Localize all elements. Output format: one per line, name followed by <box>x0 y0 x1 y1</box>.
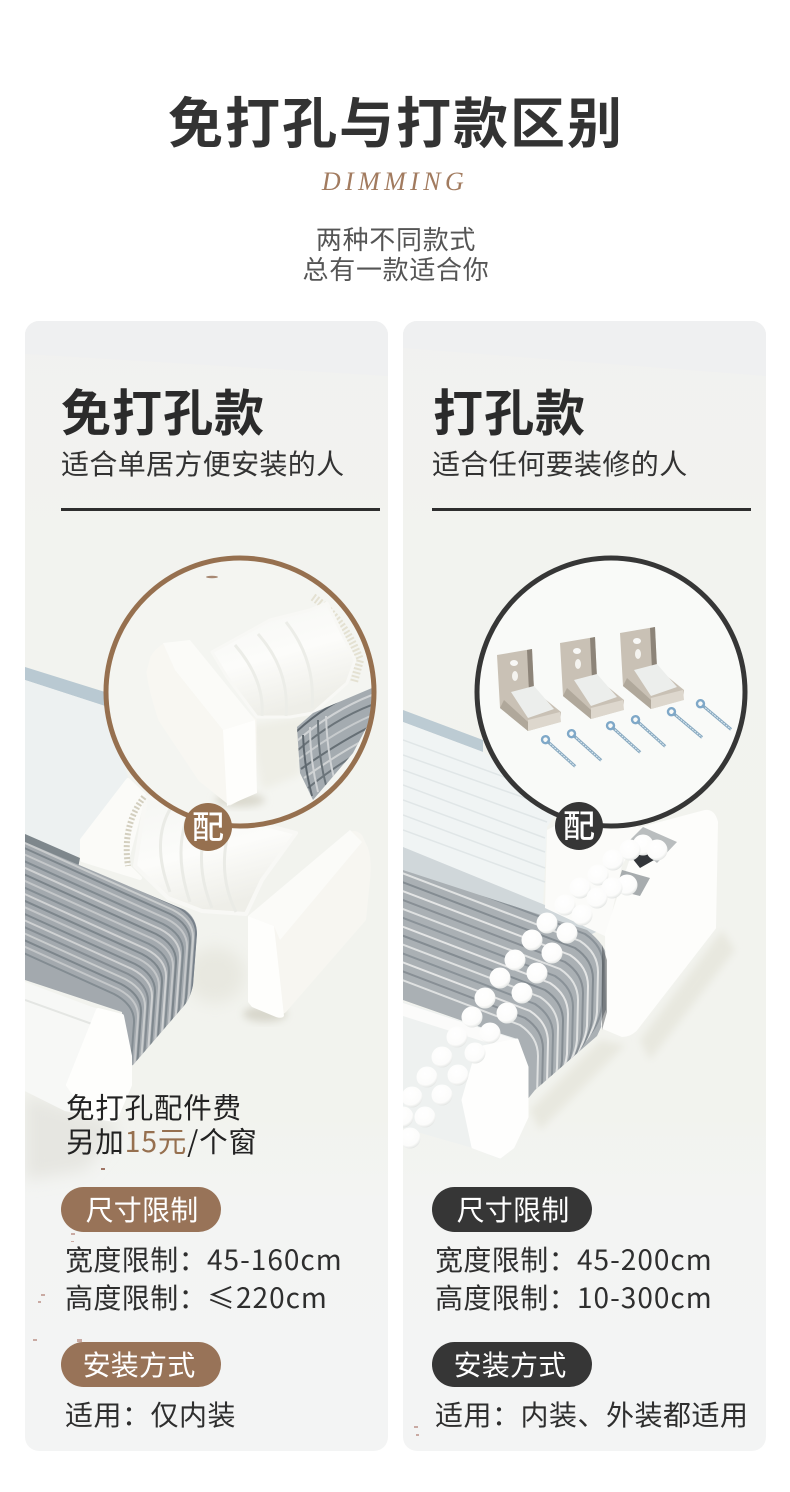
sub-heading: 适合单居方便安装的人 <box>61 443 345 483</box>
pill: 安装方式 <box>61 1342 221 1387</box>
intro text: 两种不同款式 <box>316 220 476 257</box>
pill: 安装方式: 安装方式 <box>83 1344 195 1384</box>
badge: 配 (drilled): 配 <box>563 801 595 847</box>
accessory fee note: 另加15元/个窗 <box>66 1120 258 1161</box>
magnifier circle: no-drill fitting <box>106 558 380 826</box>
product photo: no-drill blind <box>0 667 371 1180</box>
bead chain: strand 1 <box>392 834 654 1128</box>
accessory fee note <box>67 1094 255 1157</box>
accessory fee note: 免打孔配件费 <box>66 1086 242 1127</box>
panel: no-drill version <box>0 321 388 1451</box>
title: 免打孔与打款区别 <box>168 79 624 159</box>
intro text: 总有一款适合你 <box>303 250 489 287</box>
panel: drilled version <box>403 321 766 1451</box>
pill: 尺寸限制 <box>432 1187 592 1232</box>
pill: 尺寸限制: 尺寸限制 <box>457 1189 569 1229</box>
subtitle: DIMMING: DIMMING <box>321 167 468 196</box>
badge: 配 (drilled) <box>555 801 603 850</box>
product photo: drilled blind <box>403 710 732 1158</box>
size limits: 宽度限制：45-200cm <box>435 1239 713 1279</box>
intro text <box>303 220 489 287</box>
pill: 尺寸限制: 尺寸限制 <box>86 1189 198 1229</box>
specks <box>33 1168 105 1342</box>
install note: 适用：内装、外装都适用 <box>435 1394 749 1434</box>
divider <box>61 508 380 511</box>
size limits: 高度限制：10-300cm <box>435 1277 713 1317</box>
size limits: 高度限制：≤220cm <box>65 1277 328 1317</box>
bead chain: strand 2 <box>400 840 668 1148</box>
size limits <box>436 1246 710 1311</box>
sub-heading: 适合任何要装修的人 <box>432 443 688 483</box>
pill: 尺寸限制 <box>61 1187 221 1232</box>
badge: 配 (no-drill): 配 <box>192 802 224 848</box>
size limits <box>66 1246 340 1311</box>
pill: 安装方式: 安装方式 <box>454 1344 566 1384</box>
size limits: 宽度限制：45-160cm <box>65 1239 343 1279</box>
heading: 免打孔款: 免打孔款 <box>61 374 265 446</box>
divider <box>432 508 751 511</box>
magnifier circle: brackets and screws <box>477 558 745 826</box>
specks <box>414 1426 419 1436</box>
pill: 安装方式 <box>432 1342 592 1387</box>
install note: 适用：仅内装 <box>65 1394 236 1434</box>
badge: 配 (no-drill) <box>184 802 232 851</box>
heading: 打孔款: 打孔款 <box>433 374 586 446</box>
